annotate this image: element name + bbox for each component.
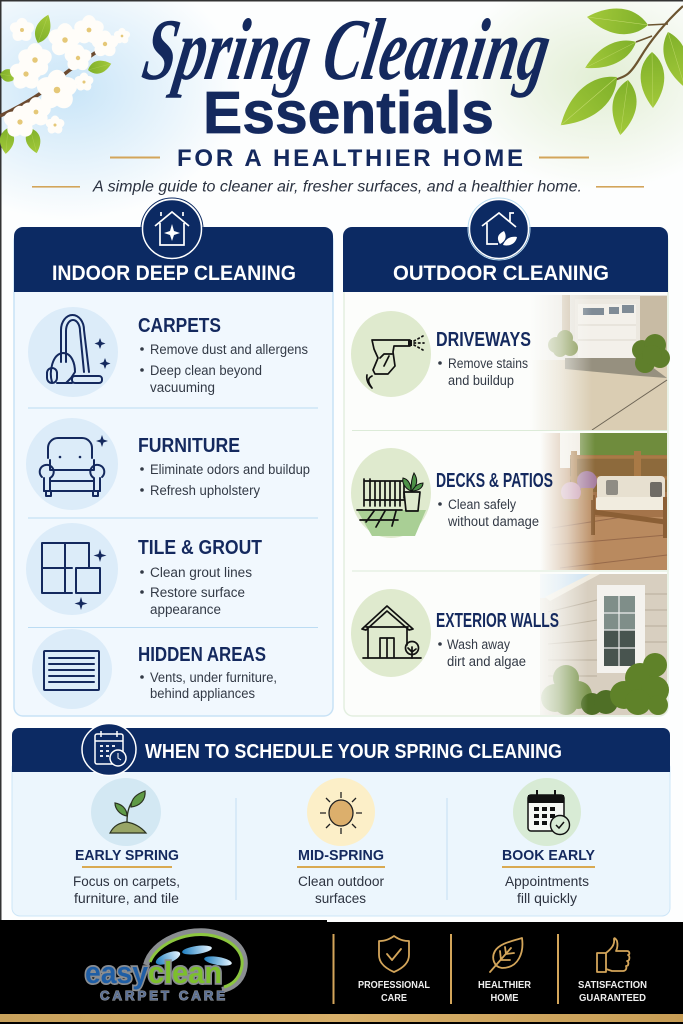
logo: clean: [148, 955, 222, 990]
column: early spring: furniture, and tile: [74, 891, 179, 906]
item: carpets: Remove dust and allergens: [150, 342, 308, 357]
blossom branch: [0, 12, 131, 155]
badge: professional care: PROFESSIONAL: [358, 979, 431, 991]
item: carpets: Deep clean beyond: [150, 363, 262, 378]
item: tile and grout: TILE & GROUT: [138, 537, 262, 559]
schedule header: [12, 724, 670, 776]
icon: house: [351, 589, 431, 677]
badge: healthier home: HOME: [490, 992, 518, 1004]
photo: deck: [540, 433, 667, 570]
item: furniture: Refresh upholstery: [150, 483, 260, 498]
schedule header: WHEN TO SCHEDULE YOUR SPRING CLEANING: [145, 741, 562, 763]
column: mid-spring: Clean outdoor: [298, 874, 385, 889]
column: book early: [502, 778, 595, 906]
item: furniture: FURNITURE: [138, 435, 240, 457]
item: carpets: CARPETS: [138, 315, 221, 337]
icon: calendar check: [513, 778, 581, 846]
indoor header: INDOOR DEEP CLEANING: [52, 261, 296, 285]
badge: professional care: CARE: [381, 992, 407, 1004]
title: [137, 2, 558, 146]
column: book early: BOOK EARLY: [502, 847, 595, 864]
item: hidden areas: HIDDEN AREAS: [138, 644, 266, 666]
item: driveways: [351, 311, 531, 397]
item: hidden areas: [32, 629, 277, 709]
outdoor header: OUTDOOR CLEANING: [393, 261, 609, 285]
icon: deck railing: [351, 448, 431, 538]
logo: CARPET CARE: [100, 988, 225, 1003]
badge: professional care: [358, 936, 431, 1004]
item: hidden areas: Vents, under furniture,: [150, 670, 277, 685]
item: tile and grout: [26, 523, 262, 617]
column: early spring: Focus on carpets,: [73, 874, 180, 889]
badge: satisfaction guaranteed: SATISFACTION: [578, 979, 647, 991]
item: furniture: [26, 418, 310, 510]
column: early spring: EARLY SPRING: [75, 847, 179, 864]
title: Essentials: [203, 80, 494, 146]
column: mid-spring: surfaces: [315, 891, 366, 906]
footer: [0, 920, 683, 1024]
item: furniture: Eliminate odors and buildup: [150, 462, 310, 477]
panel: outdoor cleaning: [343, 198, 670, 716]
panel: indoor deep cleaning: [14, 198, 333, 716]
column: book early: Appointments: [505, 874, 589, 889]
icon: vent: [32, 629, 112, 709]
badge: healthier home: [478, 938, 531, 1004]
item: decks and patios: Clean safely: [448, 497, 516, 512]
green leaves branch: [552, 4, 683, 137]
icon: armchair: [26, 418, 118, 510]
icon: sun: [307, 778, 375, 846]
badge: satisfaction guaranteed: [578, 938, 647, 1004]
panel: schedule: [12, 724, 670, 916]
item: driveways: DRIVEWAYS: [436, 329, 531, 351]
photo: exterior wall: [530, 574, 669, 715]
photo: driveway: [530, 295, 670, 430]
item: exterior walls: Wash away: [447, 637, 510, 652]
icon: sprout: [91, 778, 161, 846]
column: mid-spring: [297, 778, 385, 906]
item: carpets: vacuuming: [150, 380, 215, 395]
column: book early: fill quickly: [517, 891, 577, 906]
item: carpets: [28, 307, 308, 397]
item: driveways: Remove stains: [448, 356, 528, 371]
item: driveways: and buildup: [448, 373, 514, 388]
item: exterior walls: dirt and algae: [447, 654, 526, 669]
item: tile and grout: Restore surface: [150, 585, 245, 600]
tagline: A simple guide to cleaner air, fresher surfaces, and a healthier home.: [92, 178, 582, 196]
column: mid-spring: MID-SPRING: [298, 847, 384, 864]
item: decks and patios: [351, 448, 553, 538]
logo: easy: [85, 955, 149, 990]
item: decks and patios: DECKS & PATIOS: [436, 470, 553, 492]
item: exterior walls: EXTERIOR WALLS: [436, 610, 559, 632]
item: exterior walls: [351, 589, 559, 677]
column: early spring: [73, 778, 180, 906]
icon: pressure washer: [351, 311, 431, 397]
item: tile and grout: Clean grout lines: [150, 565, 252, 580]
outdoor header: [343, 198, 668, 292]
indoor header: [14, 198, 333, 292]
item: hidden areas: behind appliances: [150, 686, 255, 701]
badge: healthier home: HEALTHIER: [478, 979, 531, 991]
icon: tiles: [26, 523, 118, 615]
item: tile and grout: appearance: [150, 602, 221, 617]
item: decks and patios: without damage: [447, 514, 539, 529]
subtitle: for a healthier home: FOR A HEALTHIER HOME: [177, 145, 523, 172]
icon: vacuum: [28, 307, 118, 397]
badge: satisfaction guaranteed: GUARANTEED: [579, 992, 646, 1004]
logo: [85, 931, 245, 1003]
